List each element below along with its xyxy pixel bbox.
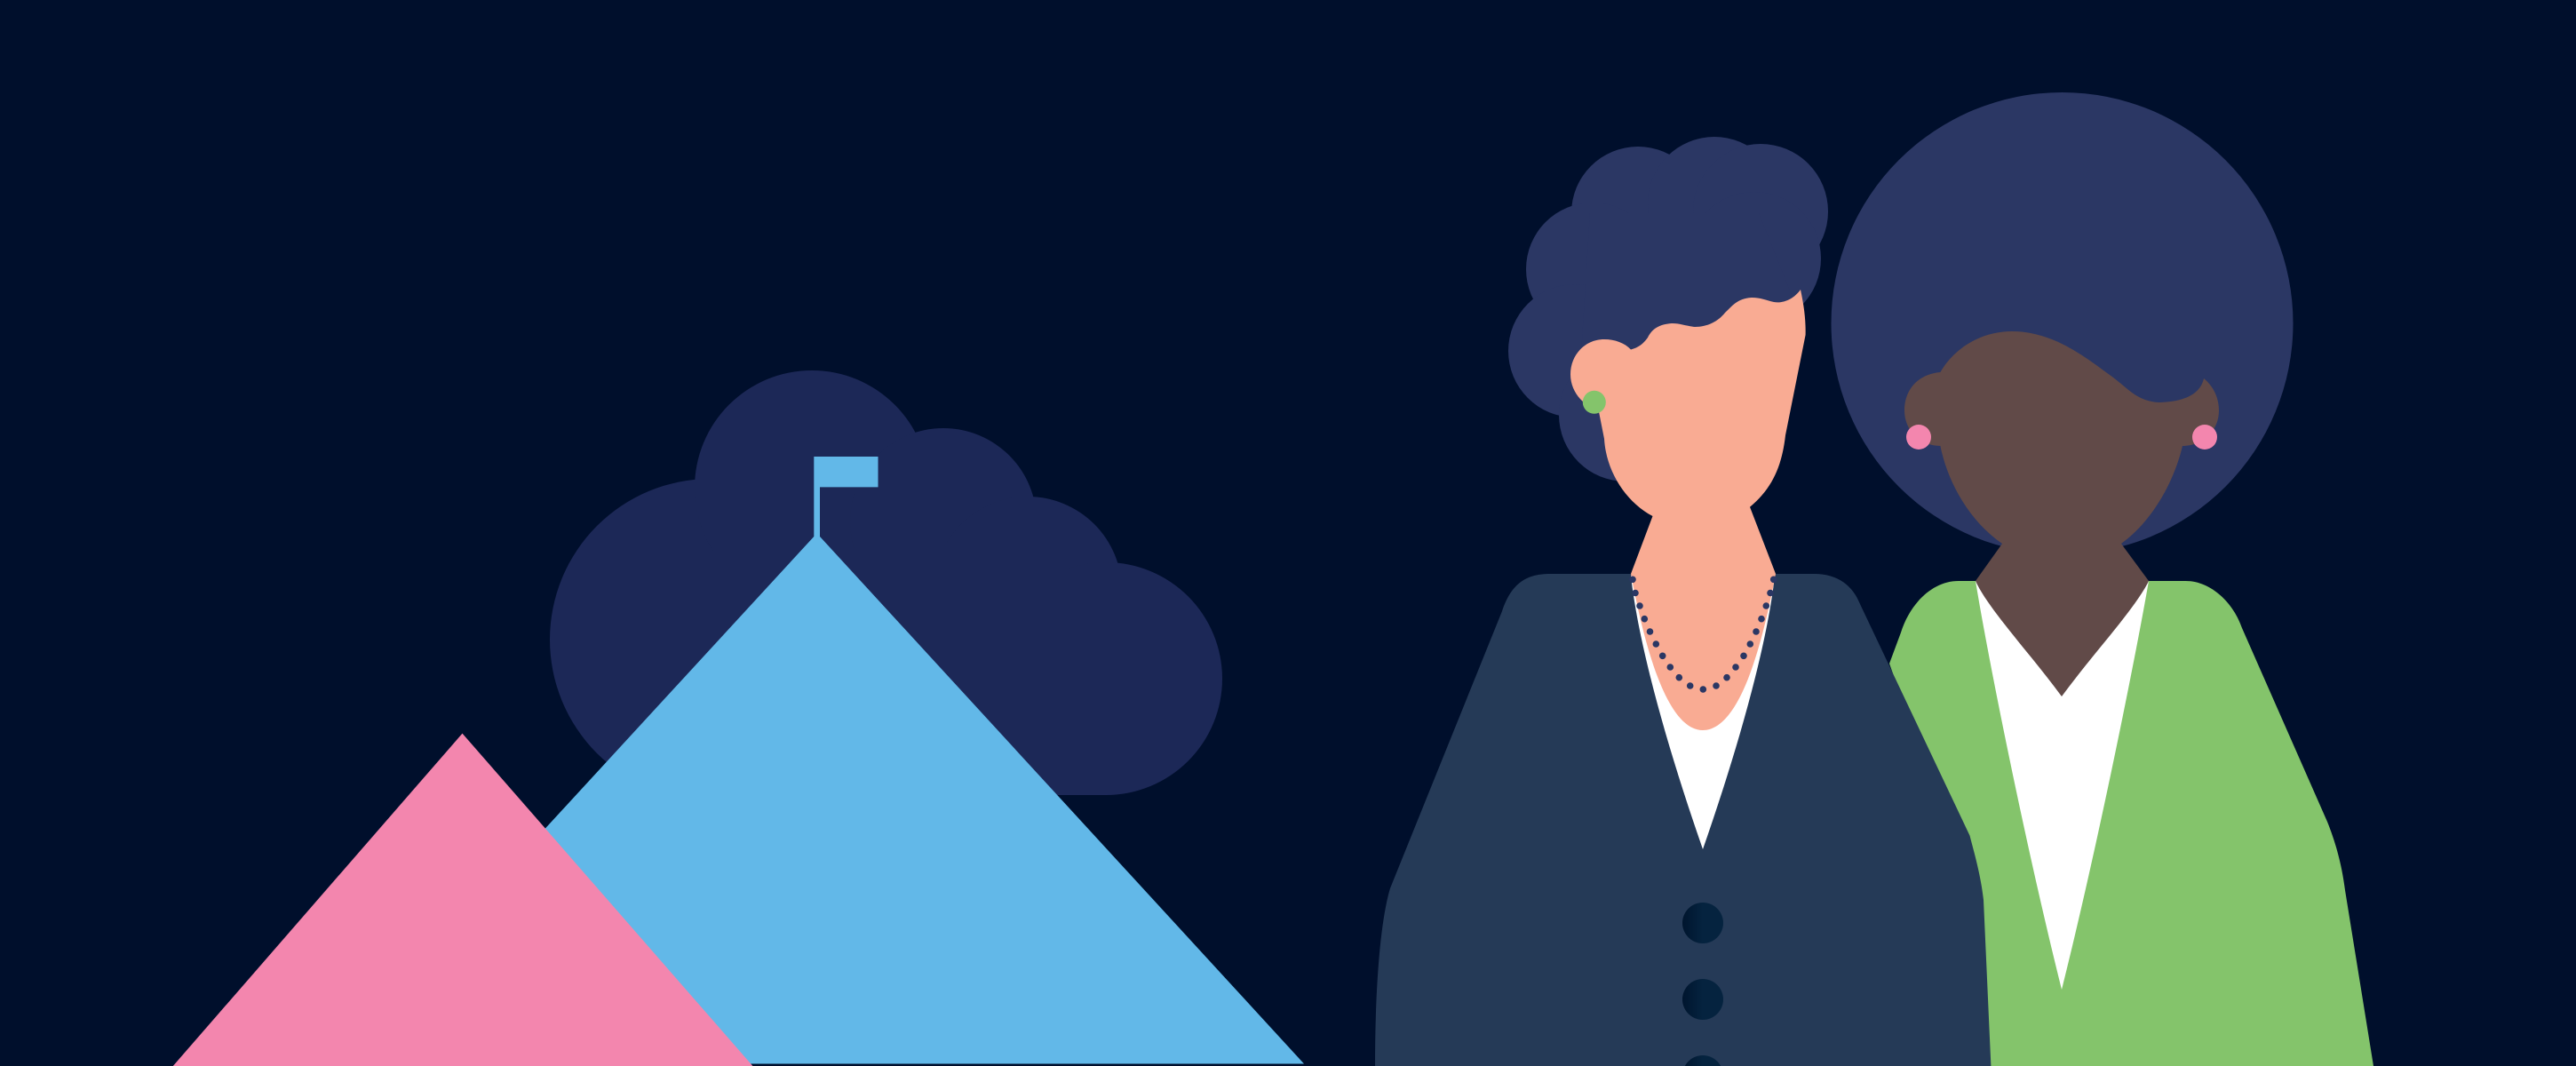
woman on the right <box>1832 92 2373 1066</box>
green cardigan <box>1889 581 2373 1066</box>
white blouse <box>1631 576 1775 849</box>
blue mountain with flag <box>329 457 1304 1064</box>
pearl necklace <box>1629 576 1777 693</box>
mountains <box>173 457 1304 1066</box>
woman on the left <box>1375 137 1991 1066</box>
green earring <box>1583 391 1606 414</box>
afro hair <box>1832 92 2294 554</box>
navy jacket <box>1375 574 1991 1066</box>
face, ear and neck <box>1570 290 1806 730</box>
face, ears and neck <box>1904 331 2219 696</box>
pink earrings <box>1906 425 2217 449</box>
pink mountain <box>173 734 752 1066</box>
jacket buttons <box>1682 903 1723 1066</box>
curly hair <box>1508 137 1828 481</box>
cloud behind mountains <box>550 370 1222 800</box>
white blouse <box>1976 581 2149 990</box>
